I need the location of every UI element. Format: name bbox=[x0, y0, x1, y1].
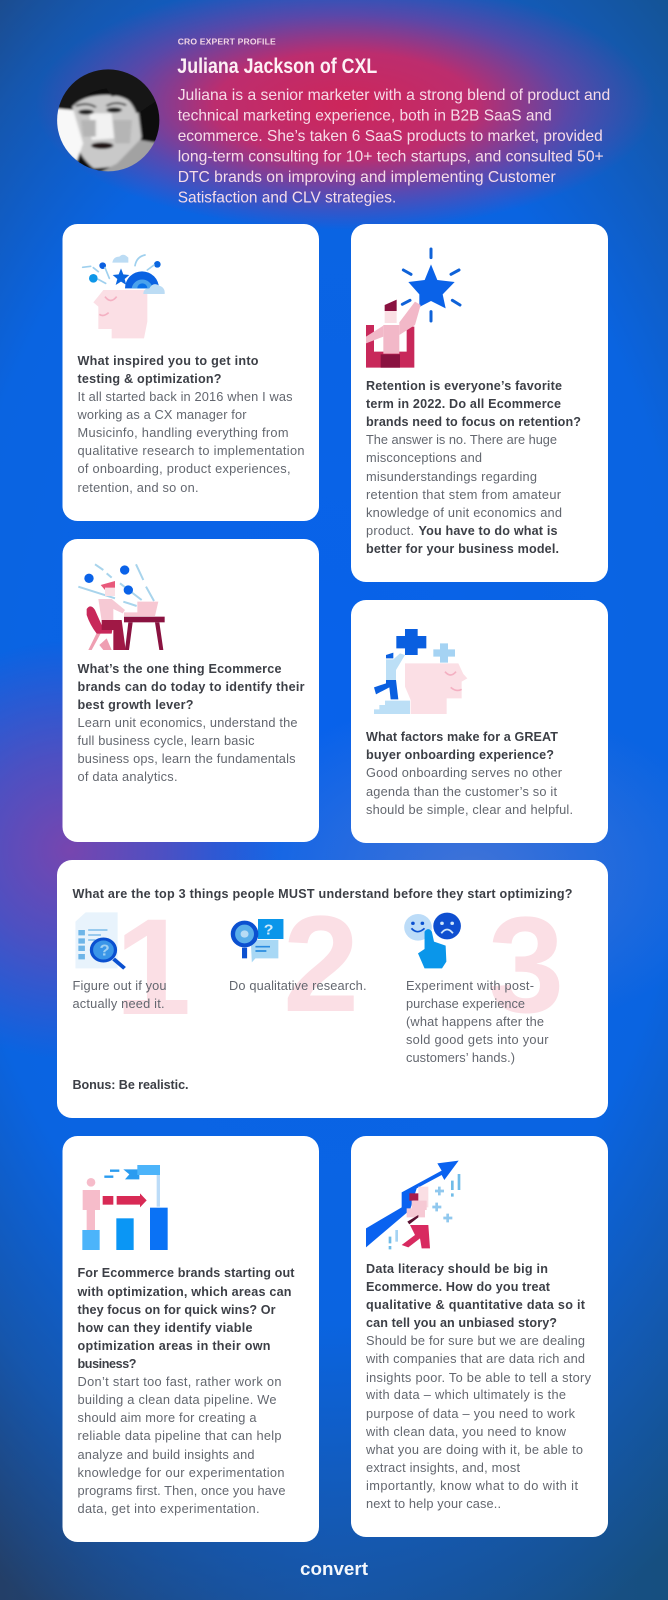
text block: retention, and so on. bbox=[78, 480, 198, 495]
text block: What’s the one thing Ecommerce bbox=[78, 662, 282, 676]
text block: knowledge of unit economics and bbox=[366, 505, 562, 520]
text block: term in 2022. Do all Ecommerce bbox=[366, 397, 561, 411]
big numerals: 3 bbox=[488, 889, 564, 1042]
text block: It all started back in 2016 when I was bbox=[78, 389, 292, 404]
bio text: ecommerce. She’s taken 6 SaaS products to market, provided bbox=[178, 128, 603, 145]
text block: knowledge for our experimentation bbox=[78, 1465, 284, 1480]
big numerals: 2 bbox=[283, 888, 359, 1041]
icon: document and magnifier bbox=[75, 912, 125, 968]
text block: with optimization, which areas can bbox=[76, 1285, 292, 1299]
text block: Learn unit economics, understand the bbox=[78, 715, 298, 730]
text block: with clean data, you need to know bbox=[365, 1424, 567, 1439]
text block: What factors make for a GREAT bbox=[366, 730, 558, 744]
text block bbox=[78, 662, 305, 784]
panel: what inspired you bbox=[62, 224, 319, 521]
big numerals bbox=[115, 888, 564, 1044]
item 3 text: customers’ hands.) bbox=[406, 1050, 515, 1065]
bio text: technical marketing experience, both in B2B SaaS and bbox=[178, 107, 552, 124]
panel: data literacy bbox=[351, 1136, 608, 1537]
text block: best growth lever? bbox=[78, 698, 194, 712]
icon: magnifier and speech bubbles: ? bbox=[264, 922, 274, 938]
header: expert profile bbox=[53, 37, 610, 206]
text block: of onboarding, product experiences, bbox=[78, 461, 290, 476]
text block: The answer is no. There are huge bbox=[366, 432, 557, 447]
panel: top 3 things bbox=[57, 860, 608, 1118]
big numerals: 1 bbox=[115, 891, 191, 1044]
text block: Don’t start too fast, rather work on bbox=[78, 1374, 282, 1389]
text block: programs first. Then, once you have bbox=[78, 1483, 286, 1498]
text block: misconceptions and bbox=[366, 450, 482, 465]
text block bbox=[366, 730, 573, 817]
item 3 text: purchase experience bbox=[406, 996, 525, 1011]
portrait photo bbox=[57, 69, 160, 172]
text block: insights poor. To be able to tell a story bbox=[366, 1370, 592, 1385]
heading: What are the top 3 things people MUST understand before they start optimizing? bbox=[72, 887, 572, 901]
logo: convert: convert bbox=[300, 1558, 368, 1579]
text block: You have to do what is bbox=[418, 524, 558, 538]
item 3 text: (what happens after the bbox=[406, 1014, 544, 1029]
icon: document and magnifier: ? bbox=[99, 942, 110, 959]
text block: can tell you an unbiased story? bbox=[366, 1316, 557, 1330]
text block: qualitative research to implementation bbox=[78, 443, 304, 458]
text block: For Ecommerce brands starting out bbox=[78, 1266, 295, 1280]
text block: misunderstandings regarding bbox=[366, 469, 537, 484]
text block: data, get into experimentation. bbox=[78, 1501, 260, 1516]
text block: importantly, know what to do with it bbox=[366, 1478, 578, 1493]
text block: optimization areas in their own bbox=[78, 1339, 270, 1353]
icon: smiley and sad faces with hand bbox=[404, 913, 461, 968]
text block: next to help your case.. bbox=[366, 1496, 501, 1511]
panel: retention bbox=[351, 224, 608, 582]
icon: head with ideas bbox=[83, 255, 165, 338]
text block bbox=[76, 1266, 295, 1516]
text block: brands can do today to identify their bbox=[78, 680, 305, 694]
text block: product. bbox=[366, 523, 414, 538]
panel: onboarding bbox=[351, 600, 608, 843]
eyebrow label: CRO EXPERT PROFILE bbox=[178, 37, 276, 47]
text block: with data – which ultimately is the bbox=[365, 1387, 566, 1402]
bio text: Satisfaction and CLV strategies. bbox=[178, 189, 396, 206]
icon: magnifier and speech bubbles bbox=[233, 919, 283, 962]
text block: brands need to focus on retention? bbox=[366, 415, 581, 429]
text block: reliable data pipeline that can help bbox=[78, 1428, 282, 1443]
text block: what you are doing with it, be able to bbox=[365, 1442, 583, 1457]
text block: agenda than the customer’s so it bbox=[366, 784, 557, 799]
item 1 text: actually need it. bbox=[72, 996, 164, 1011]
bio text: DTC brands on improving and implementing Customer bbox=[178, 169, 556, 186]
name heading: Juliana Jackson of CXL bbox=[177, 55, 377, 78]
text block: Should be for sure but we are dealing bbox=[366, 1333, 585, 1348]
text block: What inspired you to get into bbox=[78, 354, 259, 368]
icon: person reaching for star bbox=[366, 249, 460, 368]
text block: working as a CX manager for bbox=[76, 407, 247, 422]
text block: extract insights, and, most bbox=[366, 1460, 520, 1475]
item 1 text bbox=[72, 978, 166, 1011]
bio text bbox=[178, 87, 610, 206]
text block: retention that stem from amateur bbox=[366, 487, 562, 502]
text block: analyze and build insights and bbox=[78, 1447, 254, 1462]
item 3 text bbox=[406, 978, 549, 1065]
text block: purpose of data – you need to work bbox=[366, 1406, 576, 1421]
icon: person at desk bbox=[78, 564, 165, 650]
text block bbox=[76, 354, 304, 495]
text block bbox=[365, 1262, 592, 1511]
icon: person, bars, and flag bbox=[82, 1165, 168, 1250]
bio text: long-term consulting for 10+ tech startups, and consulted 50+ bbox=[178, 148, 604, 165]
text block: should aim more for creating a bbox=[78, 1410, 257, 1425]
bonus line: Bonus: Be realistic. bbox=[72, 1078, 188, 1092]
panel: quick wins bbox=[62, 1136, 319, 1542]
text block: with companies that are data rich and bbox=[365, 1351, 585, 1366]
item 2 text: Do qualitative research. bbox=[229, 978, 366, 993]
icon: person pushing rising arrow bbox=[366, 1161, 459, 1249]
text block: should be simple, clear and helpful. bbox=[366, 802, 573, 817]
text block: building a clean data pipeline. We bbox=[78, 1392, 276, 1407]
text block: buyer onboarding experience? bbox=[366, 748, 554, 762]
text block: Retention is everyone’s favorite bbox=[366, 379, 562, 393]
text block: how can they identify viable bbox=[78, 1321, 252, 1335]
text block: better for your business model. bbox=[366, 542, 559, 556]
text block: business ops, learn the fundamentals bbox=[78, 751, 296, 766]
item 3 text: sold good gets into your bbox=[406, 1032, 549, 1047]
item 1 text: Figure out if you bbox=[72, 978, 166, 993]
panel: one thing bbox=[62, 539, 319, 842]
item 3 text: Experiment with post- bbox=[406, 978, 534, 993]
text block: Data literacy should be big in bbox=[366, 1262, 548, 1276]
text block: Ecommerce. How do you treat bbox=[366, 1280, 551, 1294]
text block: Good onboarding serves no other bbox=[366, 765, 563, 780]
text block: business? bbox=[78, 1357, 136, 1371]
text block: qualitative & quantitative data so it bbox=[366, 1298, 586, 1312]
text block bbox=[366, 379, 581, 556]
icon: head with plus signs bbox=[374, 629, 467, 714]
text block: they focus on for quick wins? Or bbox=[78, 1303, 276, 1317]
text block: testing & optimization? bbox=[78, 372, 222, 386]
text block: of data analytics. bbox=[78, 769, 178, 784]
text block: full business cycle, learn basic bbox=[78, 733, 255, 748]
text block: Musicinfo, handling everything from bbox=[78, 425, 288, 440]
bio text: Juliana is a senior marketer with a strong blend of product and bbox=[178, 87, 610, 104]
